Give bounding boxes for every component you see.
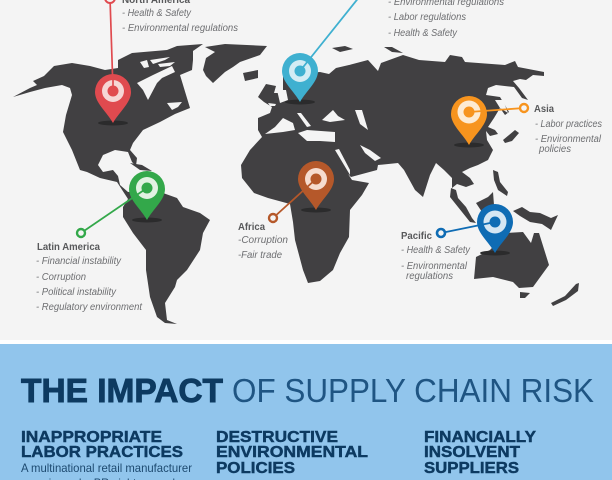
landmass: Australia — [474, 232, 549, 288]
label: Latin America — [36, 242, 143, 313]
label: Pacific: - Health & Safety — [401, 245, 471, 256]
world map — [13, 44, 579, 324]
label: Latin America: Latin America — [37, 242, 100, 253]
column: inappropriate labor practices: A multinational retail manufacturer — [21, 461, 192, 475]
column: financially insolvent suppliers: FINANCIALLY — [424, 429, 536, 446]
title — [21, 372, 594, 409]
label: Europe: - Health & Safety — [388, 28, 458, 39]
label: Pacific: Pacific — [401, 231, 432, 242]
label: Pacific: regulations — [406, 271, 453, 282]
column: inappropriate labor practices: LABOR PRACTICES — [21, 444, 183, 461]
title: THE IMPACT — [21, 372, 223, 409]
label: Europe: - Labor regulations — [388, 12, 466, 23]
landmass: Taymyr strip — [384, 47, 403, 53]
label: Europe — [388, 0, 504, 39]
column: destructive environmental policies: POLICIES — [216, 460, 295, 477]
pin: North America — [95, 0, 131, 126]
landmass: Philippines — [493, 170, 508, 196]
landmass: Eurasia and Africa — [241, 55, 544, 283]
Gulf of St Lawrence — [167, 102, 182, 110]
Mediterranean east — [298, 130, 335, 142]
Sea of Japan — [495, 100, 508, 113]
white divider stripe — [0, 340, 612, 344]
label: Asia — [534, 104, 602, 155]
pin: Europe — [282, 0, 360, 104]
Black Sea — [322, 110, 345, 122]
label: Latin America: - Corruption — [36, 272, 86, 283]
column: inappropriate labor practices — [21, 429, 192, 480]
label: Africa — [238, 222, 288, 261]
label: Africa: Africa — [238, 222, 265, 233]
landmass: Iceland — [243, 70, 258, 81]
column: financially insolvent suppliers: SUPPLIERS — [424, 460, 519, 477]
label: North America: - Environmental regulations — [122, 23, 238, 34]
Baltic Sea — [277, 90, 288, 103]
Mediterranean west — [265, 118, 295, 134]
label: Asia: - Labor practices — [535, 119, 602, 130]
label: North America: - Health & Safety — [122, 8, 192, 19]
landmass: New Guinea — [513, 207, 558, 230]
label: Pacific: - Environmental — [401, 261, 468, 272]
column: financially insolvent suppliers: INSOLVENT — [424, 444, 520, 461]
North Sea notch — [268, 103, 276, 106]
Adriatic — [297, 113, 311, 127]
landmass: Japan — [503, 130, 519, 143]
label: North America — [122, 0, 238, 34]
label: Latin America: - Financial instability — [36, 256, 122, 267]
column: inappropriate labor practices: INAPPROPRIATE — [21, 429, 162, 446]
landmass: Greenland — [203, 44, 267, 83]
pin: Pacific — [437, 204, 513, 256]
label: Asia: Asia — [534, 104, 554, 115]
landmass: Arctic islands — [332, 46, 353, 52]
seas and bays — [137, 47, 508, 175]
column: destructive environmental policies: DESTRUCTIVE — [216, 429, 338, 446]
column: destructive environmental policies — [216, 429, 368, 477]
label: Asia: - Environmental — [535, 134, 602, 145]
Red Sea — [335, 149, 350, 175]
Caspian Sea — [355, 110, 368, 130]
column: destructive environmental policies: ENVIRONMENTAL — [216, 444, 368, 461]
landmass: Americas — [13, 44, 210, 324]
label: Africa: -Fair trade — [238, 250, 282, 261]
panel: impact of supply chain risk — [0, 344, 612, 480]
pin: Latin America — [77, 171, 165, 237]
Hudson Bay — [137, 66, 175, 100]
label: Africa: -Corruption — [238, 235, 288, 246]
pin: Africa — [269, 161, 334, 222]
landmass: Tasmania — [520, 292, 530, 298]
label: Latin America: - Regulatory environment — [36, 302, 143, 313]
title: OF SUPPLY CHAIN RISK — [232, 372, 594, 409]
label: Latin America: - Political instability — [36, 287, 117, 298]
Arctic channels — [140, 47, 203, 68]
column: financially insolvent suppliers — [424, 429, 536, 477]
Arctic bay — [346, 54, 364, 65]
Persian Gulf — [360, 145, 381, 161]
pin: Asia — [451, 96, 528, 148]
landmass: Borneo — [476, 192, 494, 214]
landmass: New Zealand — [551, 283, 579, 306]
landmass: Cuba — [130, 163, 152, 171]
label: Pacific — [401, 231, 471, 282]
label: Asia: policies — [538, 144, 571, 155]
landmass: Sumatra and Malay — [450, 188, 476, 223]
